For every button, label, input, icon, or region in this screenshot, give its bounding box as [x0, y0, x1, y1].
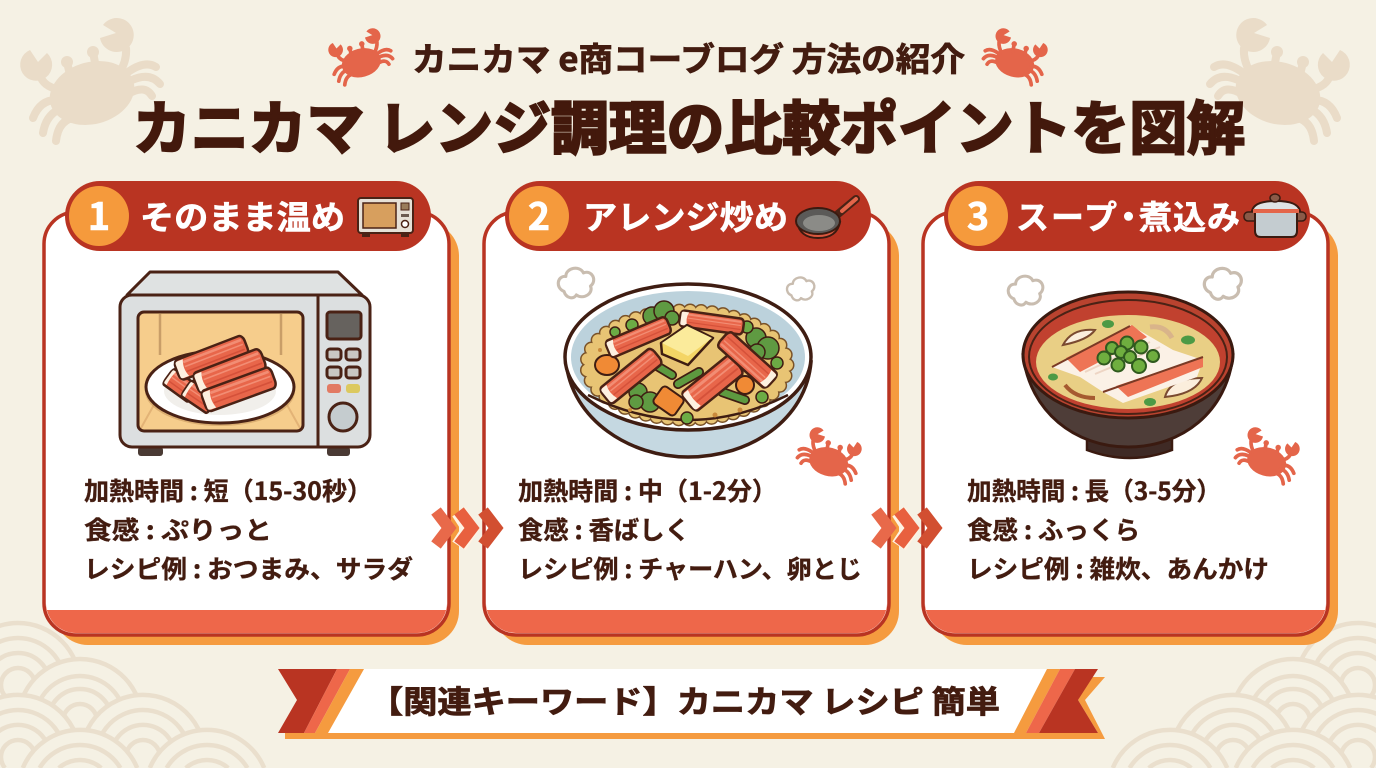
card 1 header pill [65, 181, 431, 251]
card 1 details [84, 472, 413, 586]
wave pattern: bottom left [0, 623, 264, 768]
kicker text: カニカマ e商コーブログ 方法の紹介 [412, 33, 965, 81]
card 2 details: 加熱時間 : 中（1-2分） [518, 472, 777, 508]
card 2 details [518, 472, 862, 586]
icon: pot [1244, 194, 1306, 237]
card 1 details: レシピ例 : おつまみ、サラダ [84, 550, 413, 586]
watermark crab: top left [20, 18, 160, 141]
card 1 header pill: 1 [88, 186, 110, 241]
arrow: chevrons card 1 to 2 [436, 511, 496, 546]
card 2 header pill: 2 [528, 186, 550, 241]
card 3 details: 食感 : ふっくら [967, 511, 1140, 547]
card 1 details: 食感 : ぷりっと [84, 511, 272, 547]
icon: small microwave [358, 198, 413, 237]
card 1 details: 加熱時間 : 短（15-30秒） [84, 472, 372, 508]
panel: card 2 アレンジ炒め [484, 181, 899, 645]
card 3 header pill [944, 181, 1310, 251]
panel: card 1 そのまま温め [44, 181, 459, 645]
ribbon text: 【関連キーワード】カニカマ レシピ 簡単 [369, 677, 1000, 722]
card 3 header pill: スープ・煮込み [1016, 191, 1240, 239]
icon: crab left of kicker [328, 28, 393, 85]
card 1 body [44, 212, 459, 645]
illustration: fried rice bowl [565, 284, 811, 457]
icon: small crab in card 2 [797, 427, 862, 484]
icon: frying pan [796, 199, 856, 238]
ribbon banner [278, 669, 1105, 739]
card 2 details: レシピ例 : チャーハン、卵とじ [518, 550, 862, 586]
title: カニカマ レンジ調理の比較ポイントを図解 [133, 82, 1245, 166]
icon: crab right of kicker [983, 28, 1048, 85]
card 2 body [484, 212, 899, 645]
card 2 details: 食感 : 香ばしく [518, 511, 690, 547]
icon: steam clouds [1008, 268, 1241, 305]
card 3 body [923, 212, 1338, 645]
arrow: chevrons card 2 to 3 [876, 511, 935, 546]
card 1 header pill: そのまま温め [140, 191, 345, 239]
card 3 details: レシピ例 : 雑炊、あんかけ [967, 550, 1269, 586]
wave pattern: bottom right [1113, 623, 1376, 768]
card 3 details [967, 472, 1269, 586]
icon: small crab in card 3 [1235, 427, 1300, 484]
panel: card 3 スープ・煮込み [923, 181, 1338, 645]
illustration: soup bowl [1023, 292, 1233, 458]
icon: steam clouds [558, 268, 814, 300]
watermark crab: top right [1210, 18, 1350, 141]
kicker heading [328, 28, 1048, 85]
illustration: microwave with crab sticks [120, 272, 370, 456]
card 3 details: 加熱時間 : 長（3-5分） [967, 472, 1221, 508]
card 2 header pill: アレンジ炒め [583, 191, 788, 239]
card 2 header pill [505, 181, 871, 251]
card 3 header pill: 3 [967, 186, 989, 241]
